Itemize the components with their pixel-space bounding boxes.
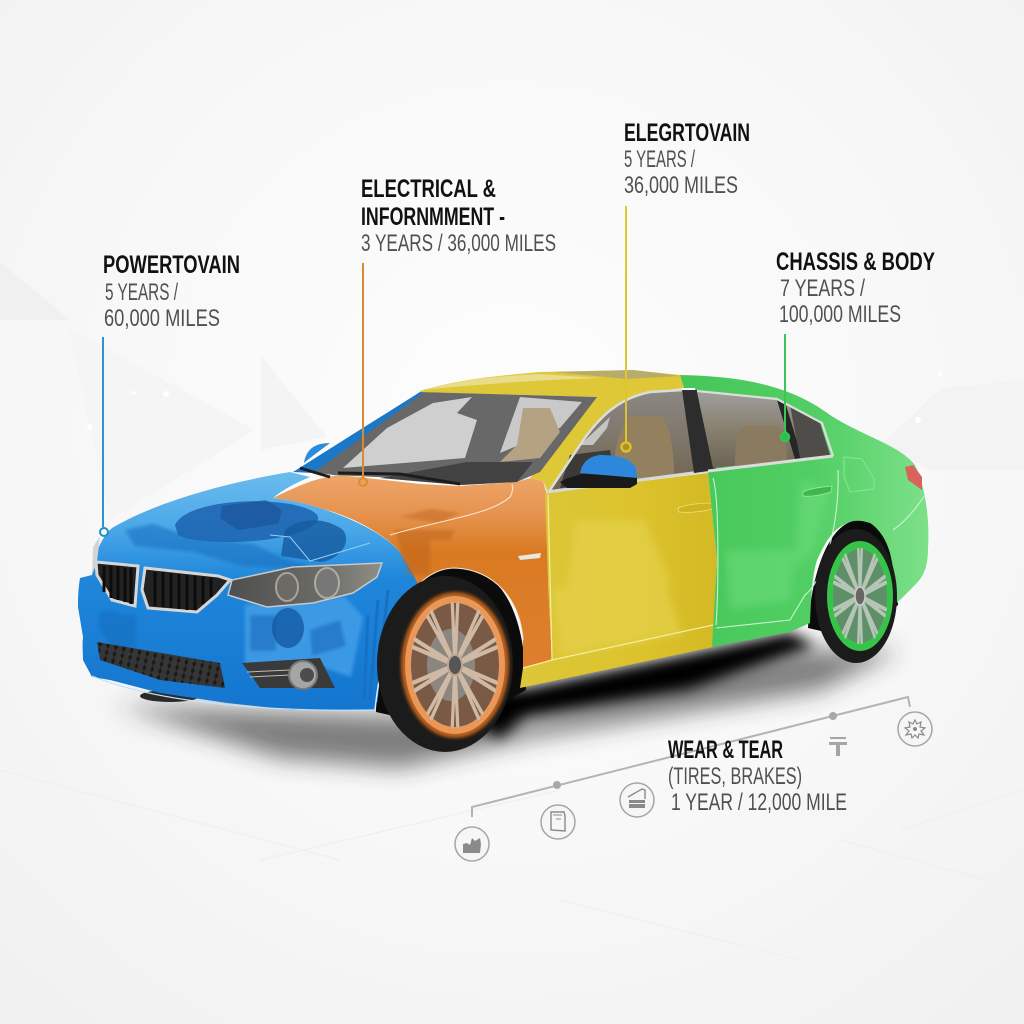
wheel arches — [376, 520, 898, 730]
icon: seat — [620, 783, 654, 817]
panel: orange electrical zone — [273, 475, 552, 668]
front wheel — [377, 576, 513, 752]
headlight — [228, 563, 382, 607]
callout: elegrtovain: ELEGRTOVAIN — [624, 119, 750, 147]
callout: powertrain: 60,000 MILES — [104, 305, 220, 332]
windshield — [293, 392, 597, 485]
callout: electrical: ELECTRICAL & — [361, 175, 496, 203]
callout: electrical: 3 YEARS / 36,000 MILES — [361, 230, 556, 257]
fog lamp — [242, 658, 335, 689]
ground shadow — [115, 632, 900, 768]
callout: chassis and body — [776, 248, 935, 442]
callout: elegrtovain — [622, 119, 750, 452]
callout: wear and tear — [668, 736, 847, 816]
car — [78, 370, 928, 752]
icon: document — [541, 805, 575, 839]
lower grille — [97, 642, 225, 688]
callout: wear and tear: 1 YEAR / 12,000 MILE — [671, 789, 847, 816]
callout: chassis and body: CHASSIS & BODY — [776, 248, 935, 276]
rear door window — [697, 391, 833, 471]
left door mirror — [304, 443, 330, 463]
callout: electrical — [359, 175, 556, 486]
icon: tee — [829, 737, 847, 756]
callout: electrical: INFORNMMENT - — [361, 203, 505, 231]
callout: powertrain: POWERTOVAIN — [103, 251, 240, 279]
callout: chassis and body: 100,000 MILES — [779, 301, 901, 328]
engine cover — [175, 501, 318, 542]
callout: chassis and body: 7 YEARS / — [780, 275, 865, 302]
panel: blue powertrain zone — [78, 472, 418, 710]
timeline — [472, 697, 910, 817]
callout: wear and tear: (TIRES, BRAKES) — [668, 763, 802, 790]
kidney grille — [92, 536, 230, 612]
tail light — [905, 465, 922, 490]
underside of front bumper — [140, 690, 200, 702]
panel: green chassis zone — [680, 375, 928, 647]
callout: elegrtovain: 36,000 MILES — [624, 172, 738, 199]
callout: powertrain: 5 YEARS / — [105, 279, 178, 306]
side mirror — [560, 455, 637, 488]
callout: wear and tear: WEAR & TEAR — [668, 736, 783, 764]
panel: yellow electronics zone — [420, 370, 717, 688]
engine components — [98, 524, 363, 677]
front door window — [546, 390, 708, 493]
callout: elegrtovain: 5 YEARS / — [624, 146, 695, 173]
rear wheel — [815, 529, 897, 663]
callout: powertrain — [100, 251, 240, 536]
icon: brake — [898, 712, 932, 746]
door pillar — [682, 390, 716, 473]
icon: engine — [455, 827, 489, 861]
wipers — [300, 468, 460, 484]
